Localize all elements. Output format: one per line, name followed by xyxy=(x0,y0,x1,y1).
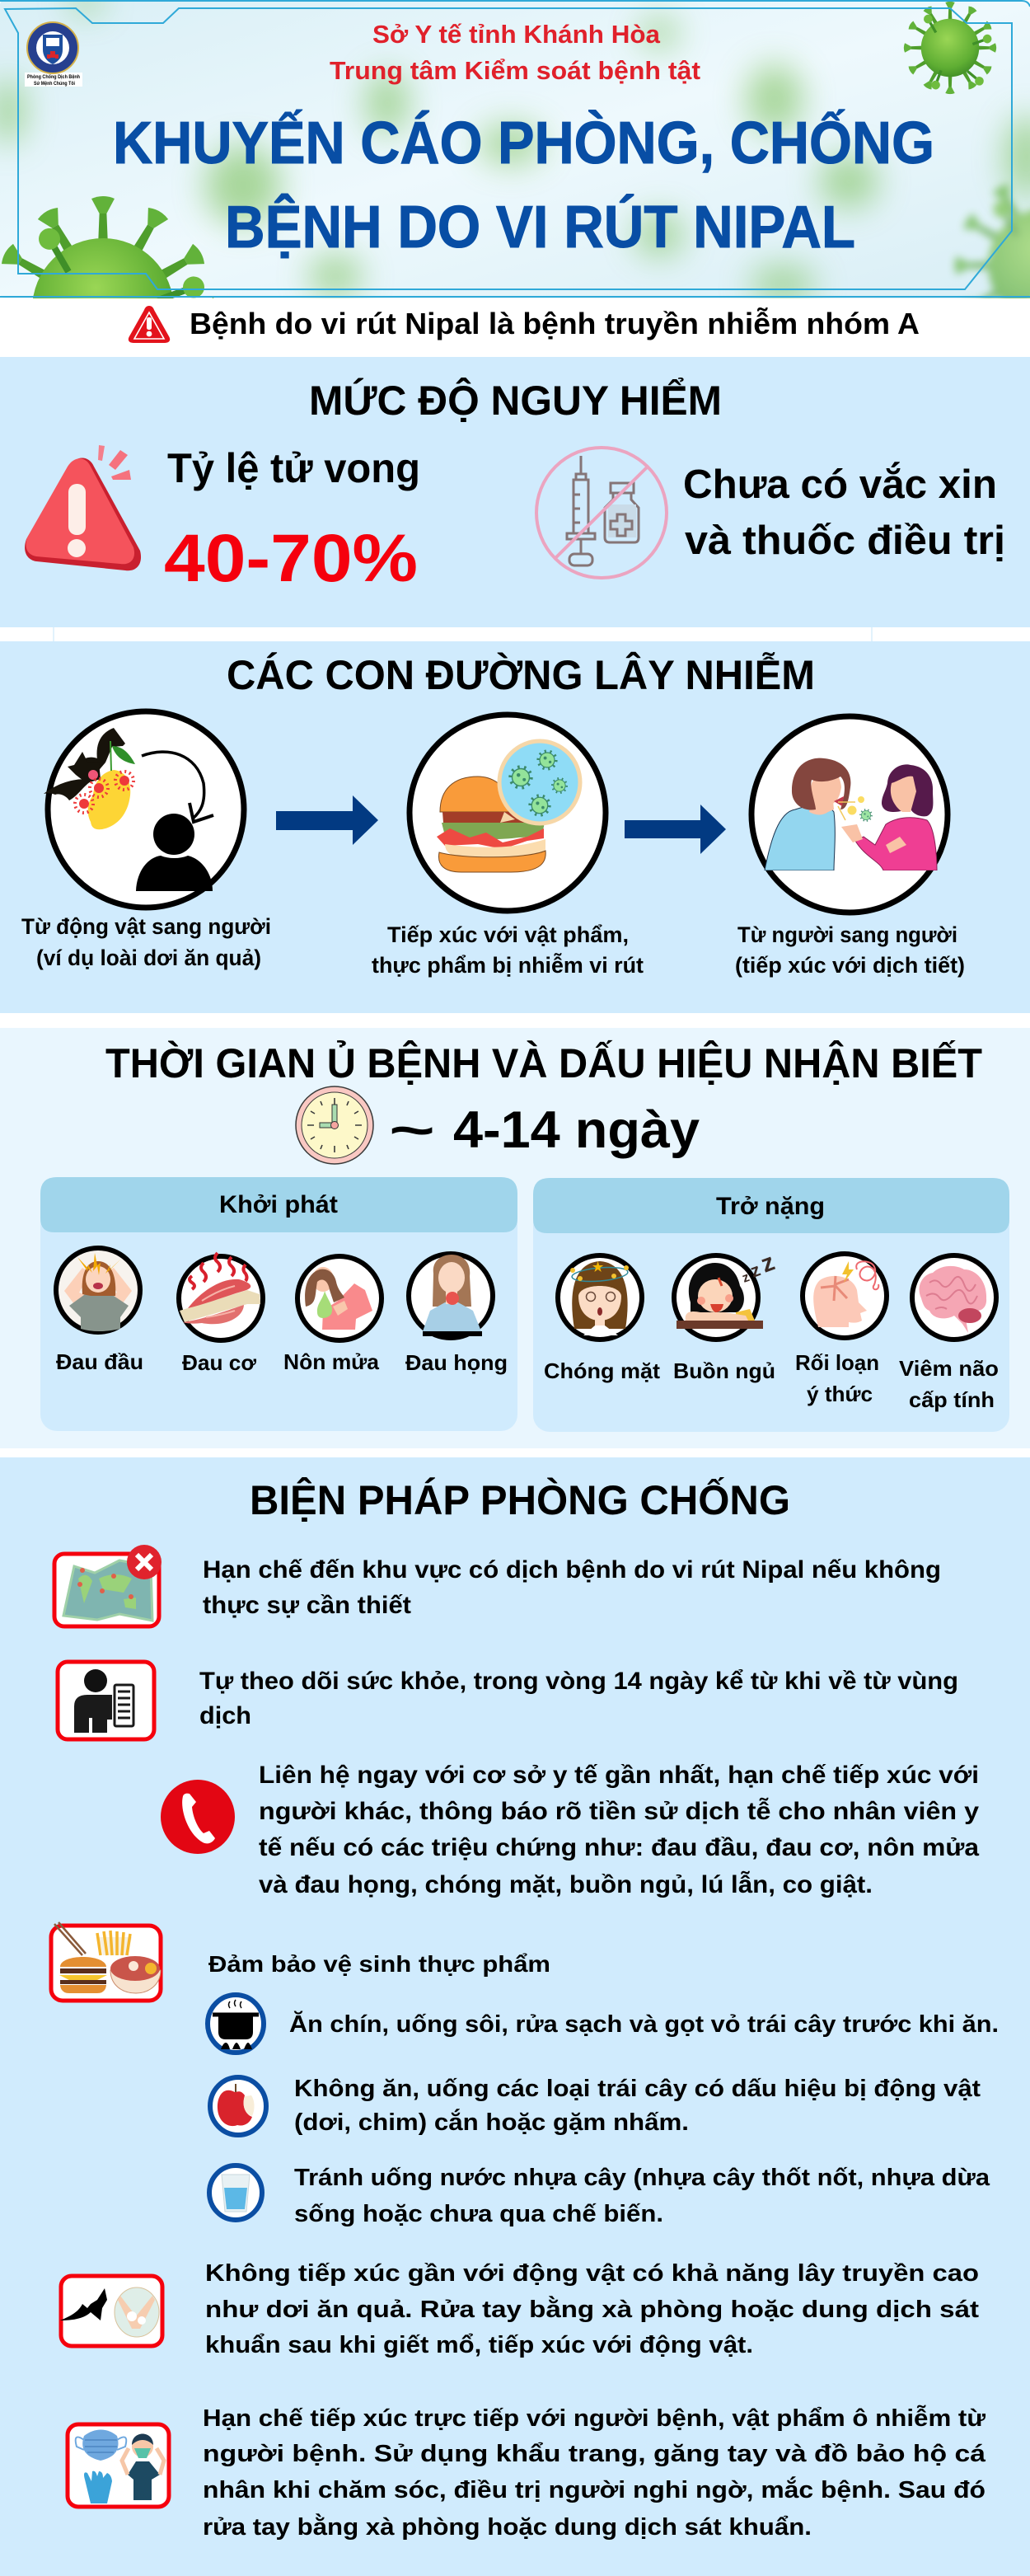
text block: Hạn chế đến khu vực có dịch bệnh do vi rút Nipal nếu không xyxy=(203,1556,941,1584)
text block: khuẩn sau khi giết mổ, tiếp xúc với động vật. xyxy=(205,2332,753,2358)
symptom labels: Rối loạn xyxy=(795,1350,879,1375)
captions: Từ động vật sang người xyxy=(21,914,271,939)
text block: tế nếu có các triệu chứng như: đau đầu, đau cơ, nôn mửa xyxy=(259,1834,980,1861)
icon: alert triangle xyxy=(25,445,141,570)
warning banner: Bệnh do vi rút Nipal là bệnh truyền nhiễm nhóm A xyxy=(190,307,920,340)
fatality label: Tỷ lệ tử vong xyxy=(167,445,420,491)
symptom labels: cấp tính xyxy=(909,1387,995,1412)
panel: các con đường lây nhiễm xyxy=(0,641,1030,1013)
incubation period: ~ xyxy=(389,1102,435,1159)
card: khởi phát xyxy=(40,1177,517,1431)
icon: self monitoring xyxy=(58,1662,154,1739)
icon: map with cross xyxy=(54,1545,162,1626)
panel: các con đường lây nhiễm: thực phẩm bị nhiễm vi rút xyxy=(372,952,644,978)
icon: clock xyxy=(296,1086,373,1164)
symptom labels xyxy=(56,1349,508,1375)
icon: drowsiness xyxy=(674,1248,778,1340)
icon: contaminated burger xyxy=(410,715,606,911)
title xyxy=(113,109,934,260)
text block xyxy=(294,2165,990,2227)
text block: Ăn chín, uống sôi, rửa sạch và gọt vỏ trái cây trước khi ăn. xyxy=(289,2011,999,2038)
icon: nausea xyxy=(297,1256,382,1340)
arrow xyxy=(276,795,378,845)
symptom labels: Đau cơ xyxy=(182,1350,257,1375)
icon: brain xyxy=(912,1255,996,1340)
panel: các con đường lây nhiễm: Từ người sang người xyxy=(737,922,957,947)
logo CDC: Phòng Chống Dịch Bệnh xyxy=(27,73,80,80)
icon: bat to human xyxy=(44,711,244,908)
heading: CÁC CON ĐƯỜNG LÂY NHIỄM xyxy=(227,652,815,698)
panel: mức độ nguy hiểm xyxy=(0,357,1030,641)
symptom labels xyxy=(544,1350,999,1412)
icon: bat and hand washing xyxy=(60,2276,162,2346)
text block: người khác, thông báo rõ tiền sử dịch tễ cho nhân viên y xyxy=(259,1797,980,1825)
icon: food xyxy=(51,1922,161,2001)
panel: các con đường lây nhiễm: (tiếp xúc với dịch tiết) xyxy=(735,953,965,978)
text: food safety lead: Đảm bảo vệ sinh thực phẩm xyxy=(208,1951,550,1977)
icon: confusion xyxy=(803,1254,887,1338)
header banner xyxy=(0,0,1030,298)
heading: MỨC ĐỘ NGUY HIỂM xyxy=(309,377,722,424)
icon: headache xyxy=(56,1248,140,1332)
icon: human to human xyxy=(751,716,948,913)
symptom labels: Viêm não xyxy=(899,1356,999,1381)
no vaccine text: và thuốc điều trị xyxy=(685,518,1005,563)
text block: Hạn chế tiếp xúc trực tiếp với người bệnh, vật phẩm ô nhiễm từ xyxy=(203,2404,986,2432)
icon: drowsiness: z xyxy=(757,1248,778,1279)
icon: drowsiness: z xyxy=(741,1270,751,1286)
text block: dịch xyxy=(199,1702,251,1729)
text block xyxy=(294,2076,981,2136)
text block: (dơi, chim) cắn hoặc gặm nhấm. xyxy=(294,2108,689,2136)
virus bottom right xyxy=(949,181,1030,298)
text block: thực sự cần thiết xyxy=(203,1592,411,1619)
symptom labels: Nôn mửa xyxy=(283,1349,380,1374)
text block xyxy=(203,1556,941,1619)
icon: phone xyxy=(161,1780,235,1854)
text block: Liên hệ ngay với cơ sở y tế gần nhất, hạn chế tiếp xúc với xyxy=(259,1762,979,1789)
text block: Không ăn, uống các loại trái cây có dấu hiệu bị động vật xyxy=(294,2076,981,2102)
incubation period: 4-14 ngày xyxy=(453,1101,700,1159)
panel: các con đường lây nhiễm: Tiếp xúc với vật phẩm, xyxy=(387,922,629,947)
symptom labels: ý thức xyxy=(807,1382,873,1406)
text block: sống hoặc chưa qua chế biến. xyxy=(294,2201,663,2227)
organisation name: Trung tâm Kiểm soát bệnh tật xyxy=(330,56,700,85)
icon: boiling pot xyxy=(208,1995,264,2053)
text block: Không tiếp xúc gần với động vật có khả năng lây truyền cao xyxy=(205,2260,979,2287)
virus bottom left xyxy=(2,196,214,298)
organisation name: Sở Y tế tỉnh Khánh Hòa xyxy=(372,20,661,49)
logo CDC: Sứ Mệnh Chúng Tôi xyxy=(34,81,75,87)
text block xyxy=(205,2260,979,2358)
icon: bitten apple xyxy=(210,2077,266,2135)
icon: no vaccine xyxy=(536,448,667,578)
text block: nhân khi chăm sóc, điều trị người nghi ngờ, mắc bệnh. Sau đó xyxy=(203,2475,986,2503)
no vaccine text: Chưa có vắc xin xyxy=(683,462,997,507)
panel: thời gian ủ bệnh và dấu hiệu xyxy=(0,1028,1030,1448)
heading: BIỆN PHÁP PHÒNG CHỐNG xyxy=(250,1476,790,1523)
icon: drowsiness: z xyxy=(747,1259,763,1282)
text block: Tránh uống nước nhựa cây (nhựa cây thốt nốt, nhựa dừa xyxy=(294,2165,990,2191)
symptom labels: Đau họng xyxy=(405,1350,508,1375)
text block: rửa tay bằng xà phòng hoặc dung dịch sát khuẩn. xyxy=(203,2513,812,2541)
fatality rate: 40-70% xyxy=(164,521,418,596)
symptom labels: Buồn ngủ xyxy=(673,1358,775,1383)
symptom labels: Đau đầu xyxy=(56,1349,143,1374)
text block: và đau họng, chóng mặt, buồn ngủ, lú lẫn, co giật. xyxy=(259,1870,873,1898)
icon: warning triangle xyxy=(129,306,170,343)
organisation name xyxy=(330,20,700,85)
text block: như dơi ăn quả. Rửa tay bằng xà phòng hoặc dung dịch sát xyxy=(205,2295,979,2323)
text block xyxy=(199,1668,958,1729)
virus top right xyxy=(904,2,996,94)
text block xyxy=(203,2404,986,2541)
text block: Tự theo dõi sức khỏe, trong vòng 14 ngày kể từ khi về từ vùng xyxy=(199,1668,958,1695)
icon: dizziness xyxy=(558,1255,642,1340)
panel: biện pháp phòng chống xyxy=(0,1457,1030,2576)
text block xyxy=(259,1762,980,1898)
icon: protective equipment xyxy=(68,2424,169,2507)
captions: (ví dụ loài dơi ăn quả) xyxy=(36,945,261,970)
title: KHUYẾN CÁO PHÒNG, CHỐNG xyxy=(113,109,934,176)
logo CDC xyxy=(25,22,82,87)
icon: muscle pain xyxy=(179,1253,263,1340)
heading: THỜI GIAN Ủ BỆNH VÀ DẤU HIỆU NHẬN BIẾT xyxy=(105,1039,982,1086)
icon: sore throat xyxy=(409,1254,493,1338)
card: khởi phát: Khởi phát xyxy=(219,1191,338,1218)
symptom labels: Chóng mặt xyxy=(544,1358,660,1383)
card: trở nặng: Trở nặng xyxy=(716,1193,825,1220)
captions xyxy=(21,914,271,970)
arrow xyxy=(625,805,726,854)
text block: người bệnh. Sử dụng khẩu trang, găng tay và đồ bảo hộ cá xyxy=(203,2441,986,2467)
title: BỆNH DO VI RÚT NIPAL xyxy=(225,194,855,260)
card: trở nặng xyxy=(533,1178,1009,1432)
icon: glass of water xyxy=(209,2165,262,2220)
no vaccine text xyxy=(683,462,1005,563)
